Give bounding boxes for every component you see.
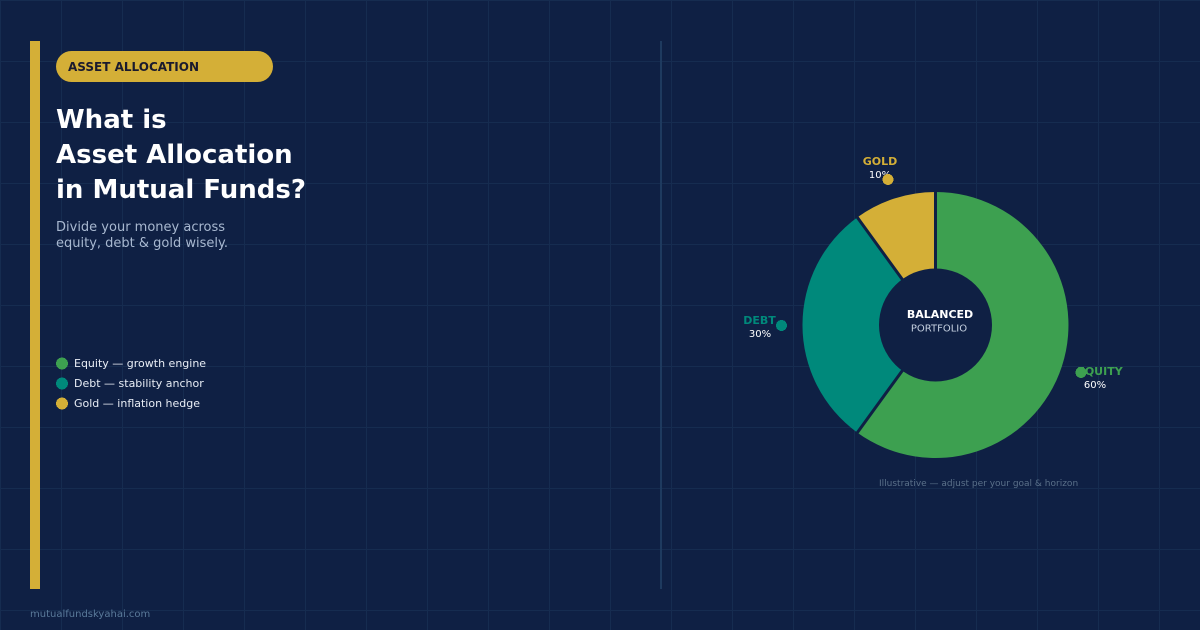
label: equity: 60%	[1084, 380, 1106, 391]
donut chart	[802, 190, 1068, 458]
segment: debt 30%	[802, 217, 936, 433]
segment: equity 60%	[857, 192, 1068, 458]
donut hole	[879, 268, 992, 382]
label: equity	[1076, 365, 1124, 391]
label: equity: EQUITY	[1077, 365, 1124, 378]
title: in Mutual Funds?	[56, 175, 306, 205]
legend item: debt: Debt — stability anchor	[74, 377, 204, 390]
badge: asset allocation: ASSET ALLOCATION	[68, 60, 199, 74]
donut centre label	[907, 308, 973, 334]
legend item: gold: Gold — inflation hedge	[74, 397, 200, 410]
label: gold: 10%	[869, 170, 891, 181]
label: gold	[863, 155, 897, 185]
legend	[56, 357, 206, 410]
subtitle: equity, debt & gold wisely.	[56, 236, 228, 251]
segment: gold 10%	[857, 192, 936, 325]
subtitle: Divide your money across	[56, 220, 225, 235]
label: debt	[743, 314, 787, 340]
donut centre label: PORTFOLIO	[911, 324, 967, 334]
label: debt: 30%	[749, 329, 771, 340]
label: debt: DEBT	[743, 314, 776, 327]
subtitle	[56, 220, 228, 251]
chart note: Illustrative — adjust per your goal & horizon	[879, 479, 1078, 489]
footer url: mutualfundskyahai.com	[30, 609, 150, 620]
donut centre label: BALANCED	[907, 308, 973, 321]
badge: asset allocation	[56, 51, 273, 82]
legend item: equity: Equity — growth engine	[74, 357, 206, 370]
title: What is	[56, 105, 167, 135]
segment separators	[856, 190, 936, 434]
label: gold: GOLD	[863, 155, 897, 168]
title	[56, 105, 306, 205]
vertical divider	[660, 41, 662, 589]
accent bar	[30, 41, 40, 589]
title: Asset Allocation	[56, 140, 293, 170]
